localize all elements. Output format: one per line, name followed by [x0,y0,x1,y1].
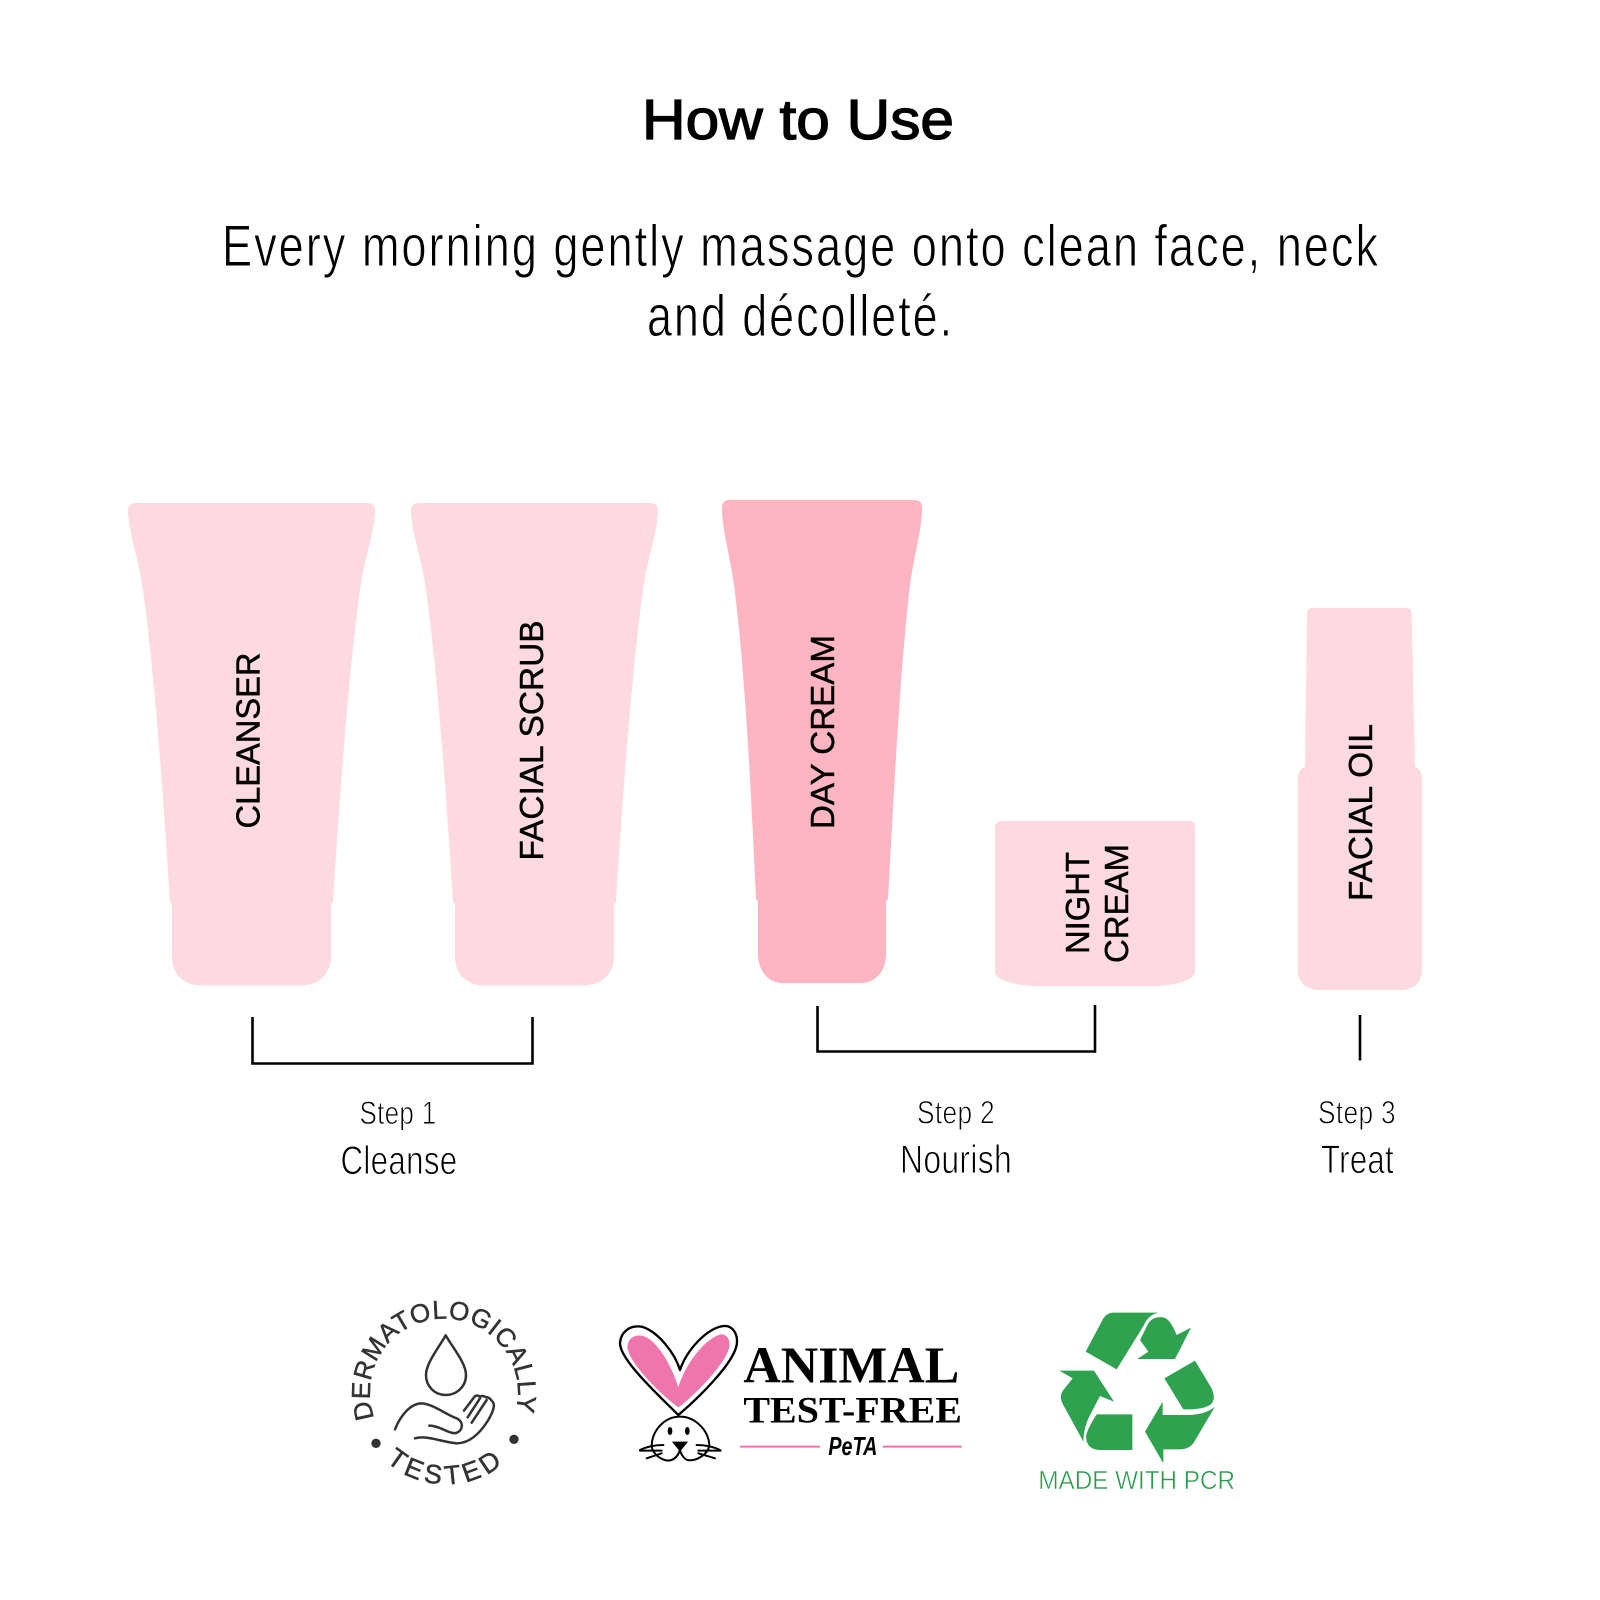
icon: recycle arrows [1059,1313,1215,1463]
step 2 label: Step 2 [917,1094,995,1130]
step 1 label: Cleanse [340,1139,458,1183]
step 3 label [1318,1094,1396,1182]
bracket: step 1 [252,1017,532,1064]
product: facial scrub tube: FACIAL SCRUB [513,620,550,860]
subtitle text block [222,214,1380,349]
product: day cream tube [722,500,922,983]
step 1 label [340,1095,458,1183]
step 3 label: Treat [1321,1138,1394,1182]
badge: peta animal test-free: PeTA [828,1431,877,1461]
badge: dermatologically tested: TESTED [391,1446,499,1484]
subtitle text block: and décolleté. [647,284,954,349]
badge: made with pcr recycling [1038,1313,1235,1495]
product: night cream jar: NIGHT [1059,852,1096,954]
step 2 label [900,1094,1012,1182]
icon: hand [395,1395,494,1443]
title: How to Use [642,88,954,152]
icon: water drop [426,1335,466,1395]
product: night cream jar [995,821,1195,986]
badge: dermatologically tested: DERMATOLOGICALLY [352,1300,536,1420]
badge: peta animal test-free [620,1326,962,1461]
badge: peta animal test-free: TEST-FREE [743,1390,962,1431]
product: facial oil bottle [1298,608,1422,990]
product: cleanser tube: CLEANSER [230,652,266,828]
step 3 label: Step 3 [1318,1094,1396,1130]
product: cleanser tube [128,503,375,986]
badge: made with pcr recycling: MADE WITH PCR [1038,1465,1235,1495]
badge: dermatologically tested [352,1300,536,1484]
bracket: step 2 [818,1005,1095,1052]
product: day cream tube: DAY CREAM [804,635,841,829]
product: facial scrub tube [411,503,658,986]
icon: bunny ears heart [620,1326,737,1415]
product: facial oil bottle: FACIAL OIL [1342,724,1379,901]
product: night cream jar: CREAM [1098,844,1135,963]
bracket: step 3 [1359,1015,1361,1060]
step 2 label: Nourish [900,1138,1012,1182]
step 1 label: Step 1 [360,1095,436,1131]
badge: peta animal test-free: ANIMAL [743,1338,959,1395]
icon: bunny face [640,1417,721,1461]
